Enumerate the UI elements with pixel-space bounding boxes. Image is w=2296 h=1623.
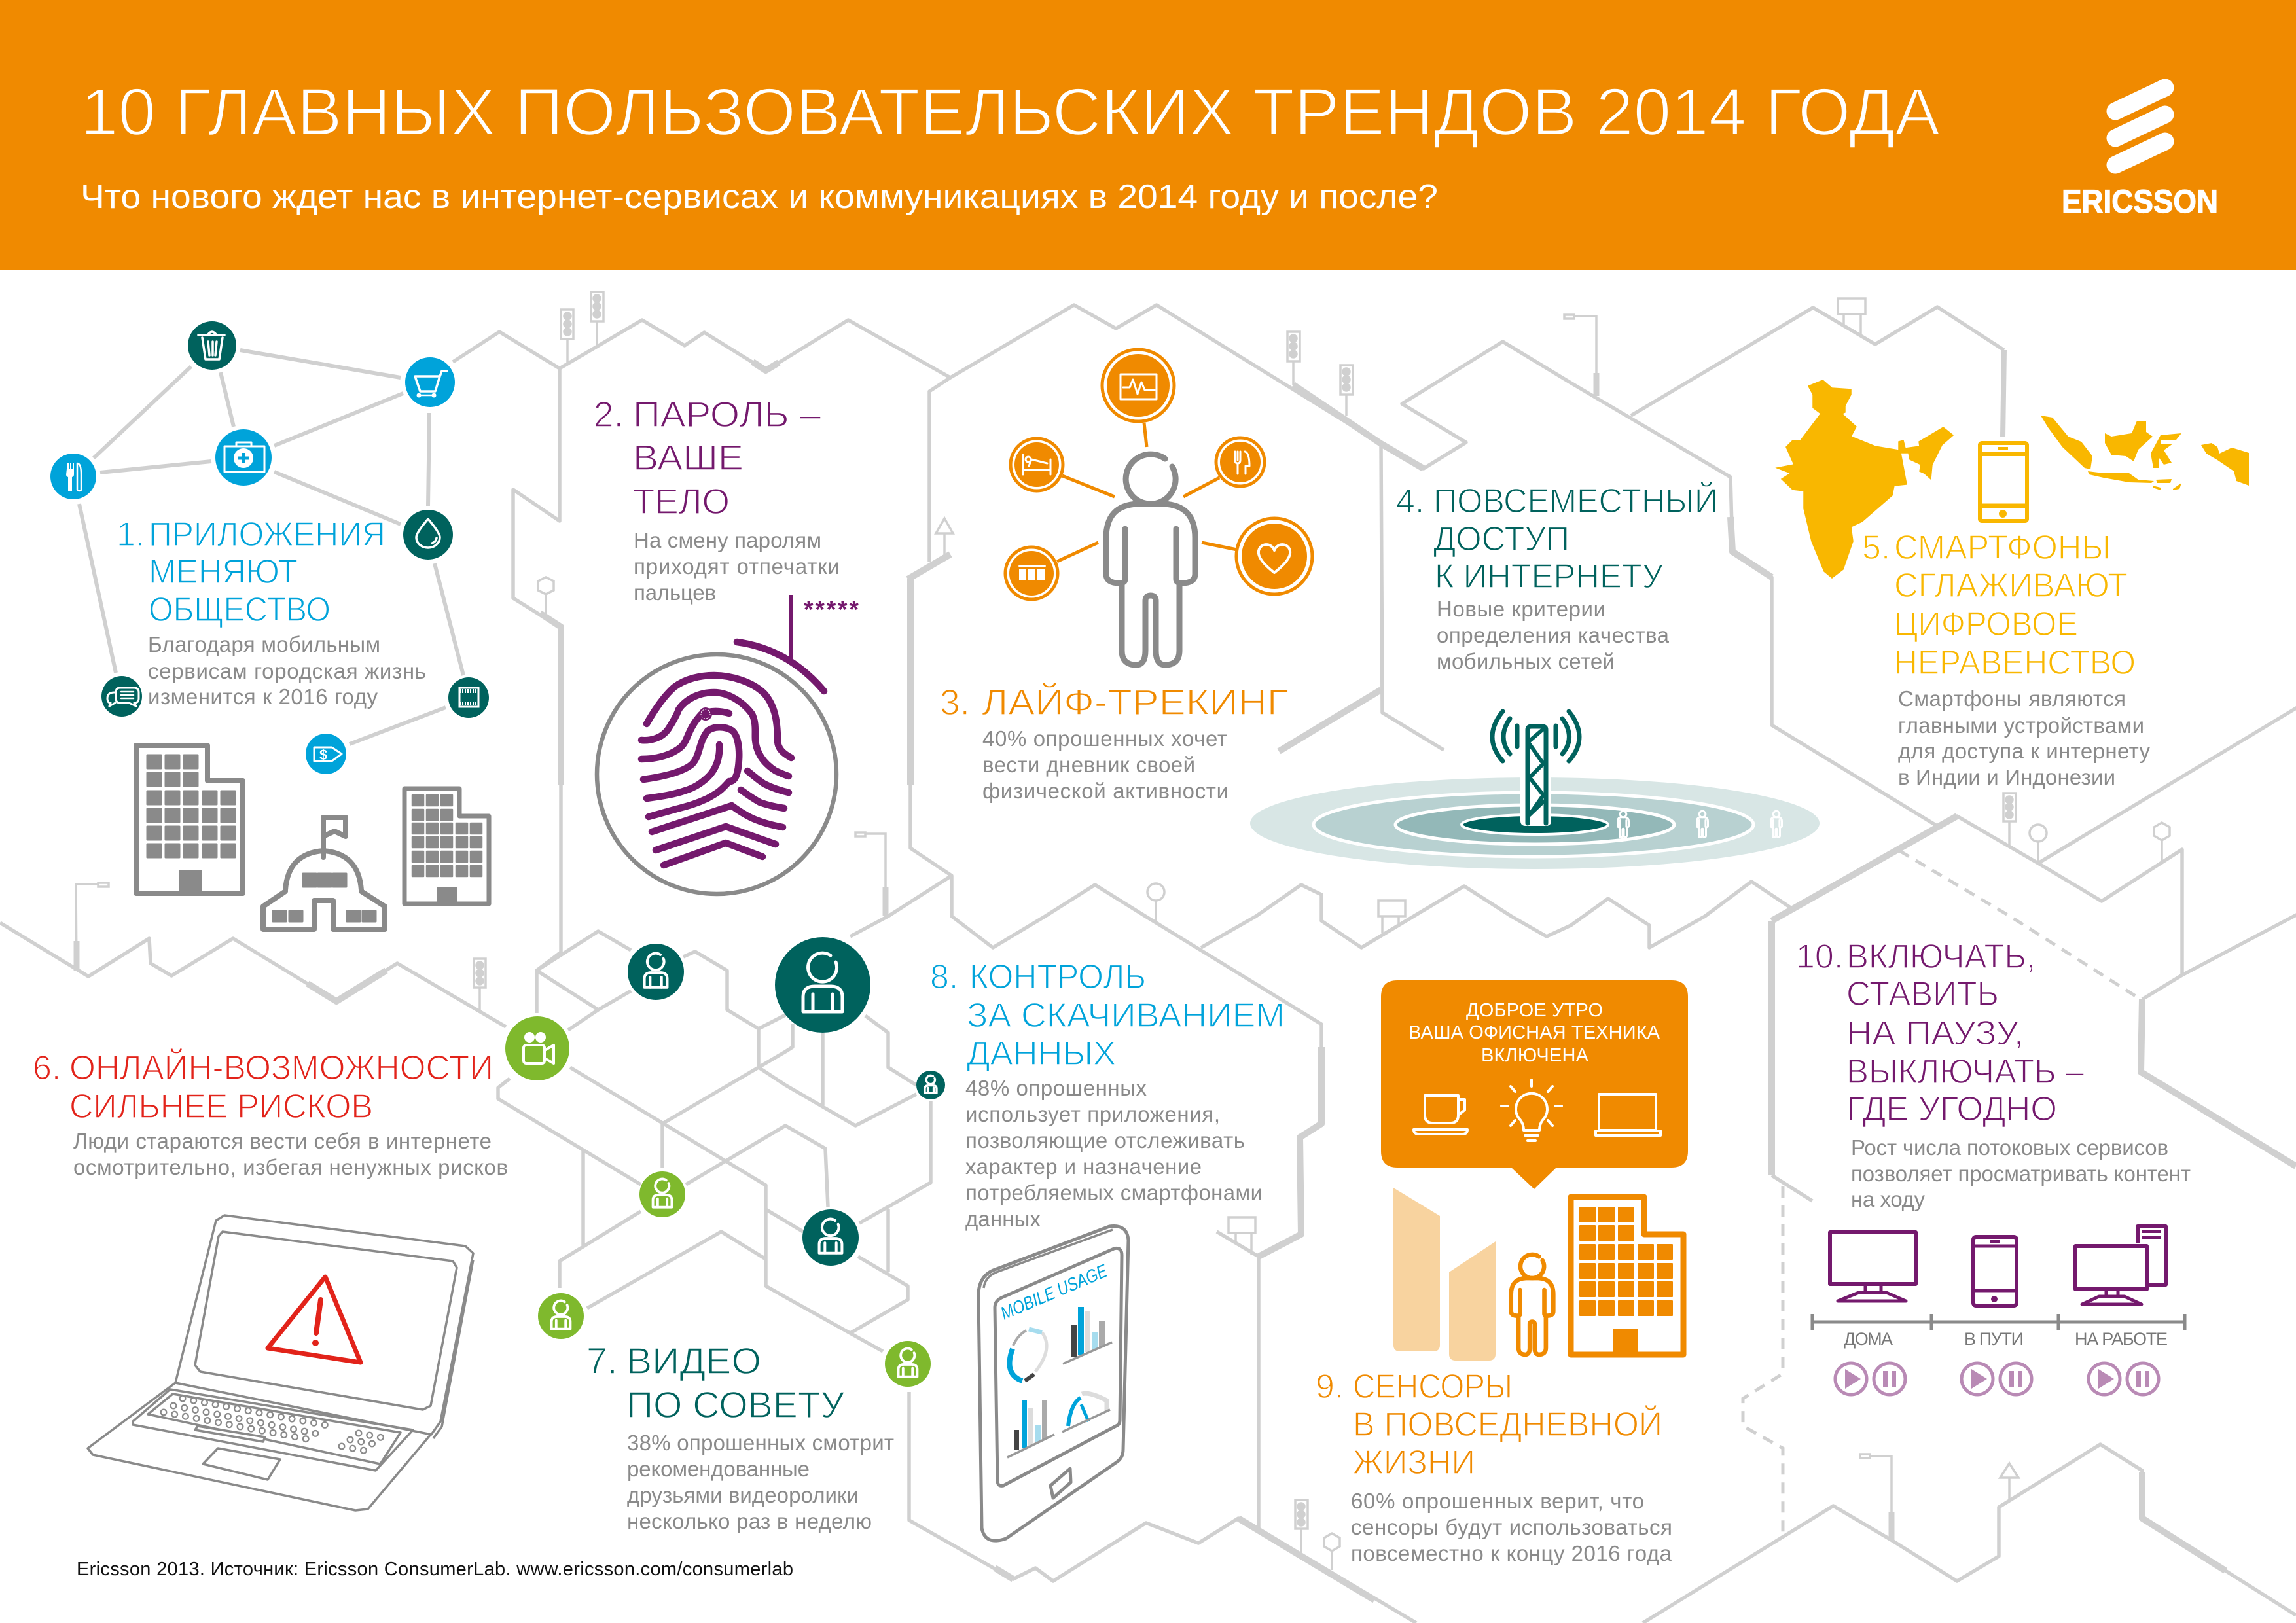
panel 9: sensors in everyday life: [1316, 980, 1688, 1565]
body text: главными устройствами: [1898, 713, 2144, 738]
body text: позволяющие отслеживать: [965, 1128, 1245, 1152]
node: teal person: [802, 1209, 859, 1266]
timeline labels: [1844, 1329, 2168, 1349]
heading: ВИДЕО: [626, 1340, 761, 1382]
node connection lines: [79, 350, 463, 744]
heading: 5.: [1862, 529, 1890, 567]
heading: 9.: [1316, 1368, 1344, 1406]
heading: [594, 394, 821, 522]
heading: [1862, 529, 2136, 682]
subtitle: Что нового ждет нас в интернет-сервисах и коммуникациях в 2014 году и после?: [81, 178, 1438, 216]
body text: 60% опрошенных верит, что: [1351, 1489, 1644, 1513]
body text: осмотрительно, избегая ненужных рисков: [73, 1155, 508, 1179]
body text: [1898, 687, 2151, 789]
Ericsson logo: ERICSSON: [2062, 183, 2218, 220]
icon: small office building: [404, 789, 489, 904]
body text: приходят отпечатки: [634, 554, 840, 579]
body text: На смену паролям: [634, 528, 821, 552]
heading: ТЕЛО: [633, 481, 730, 522]
chart: gauge: [1062, 1393, 1110, 1432]
icon: light bulb: [1501, 1080, 1562, 1141]
speech bubble: ВКЛЮЧЕНА: [1481, 1045, 1589, 1066]
icon: bed: [1011, 438, 1063, 491]
heading: ОНЛАЙН-ВОЗМОЖНОСТИ: [69, 1048, 493, 1087]
title: 10 ГЛАВНЫХ ПОЛЬЗОВАТЕЛЬСКИХ ТРЕНДОВ 2014 ГОДА: [81, 75, 1940, 149]
heading: НА ПАУЗУ,: [1846, 1014, 2024, 1052]
body text: использует приложения,: [965, 1102, 1220, 1126]
panel 1: apps change society: [50, 321, 489, 929]
icon: water drop: [403, 510, 453, 560]
node: small teal person: [916, 1071, 945, 1099]
icon: film strip: [448, 677, 489, 718]
body text: [1851, 1135, 2191, 1211]
timeline labels: В ПУТИ: [1964, 1329, 2024, 1349]
timeline labels: НА РАБОТЕ: [2075, 1329, 2168, 1349]
heading: 7.: [586, 1340, 618, 1382]
icon: school: [263, 817, 385, 929]
heading: ПОВСЕМЕСТНЫЙ: [1433, 482, 1718, 520]
node: video camera: [505, 1016, 569, 1080]
icon: phone: [1973, 1237, 2017, 1306]
icon: laptop with warning: [88, 1215, 473, 1510]
heading: КОНТРОЛЬ: [969, 958, 1146, 996]
heading: ВАШЕ: [633, 437, 744, 478]
figure: orange person: [1511, 1255, 1553, 1355]
heading: [117, 516, 386, 629]
Ericsson logo: [2062, 88, 2218, 220]
body text: Новые критерии: [1437, 597, 1605, 621]
body text: рекомендованные: [627, 1457, 810, 1481]
body text: изменится к 2016 году: [148, 685, 378, 709]
peach tower: [1449, 1241, 1496, 1361]
signal ripple rings: [1250, 777, 1820, 869]
heading: [1396, 482, 1718, 596]
body text: друзьями видеоролики: [627, 1483, 859, 1507]
panel 4: ubiquitous internet: [1250, 482, 1820, 869]
map: Indonesia: [2041, 416, 2249, 490]
body text: Люди стараются вести себя в интернете: [73, 1129, 492, 1153]
node: green person: [538, 1293, 584, 1339]
heading: 8.: [930, 958, 958, 996]
body text: сервисам городская жизнь: [148, 659, 426, 683]
icon: laptop: [1596, 1094, 1660, 1135]
heading: ДОСТУП: [1433, 520, 1570, 558]
heading: ПРИЛОЖЕНИЯ: [149, 516, 386, 554]
icon: trash bin: [188, 321, 236, 370]
body text: [634, 528, 840, 605]
body text: 48% опрошенных: [965, 1076, 1147, 1100]
icon: chat bubbles: [101, 676, 142, 717]
panel 10: play pause stop anywhere: [1796, 938, 2191, 1395]
icon: price tag: $: [319, 747, 327, 763]
heading: ВКЛЮЧАТЬ,: [1846, 938, 2036, 976]
panel 6: online possibilities outweigh risks: [33, 1048, 508, 1510]
speech bubble: ДОБРОЕ УТРО: [1466, 1000, 1603, 1021]
panel 8: data download control: [930, 958, 1285, 1541]
password asterisks: *****: [804, 596, 859, 624]
icon: fingerprint: [597, 595, 836, 894]
peach tower: [1393, 1188, 1440, 1351]
body text: [73, 1129, 508, 1179]
icon: coffee cup: [1414, 1096, 1467, 1134]
body text: мобильных сетей: [1437, 649, 1615, 673]
body text: характер и назначение: [965, 1154, 1202, 1179]
heading: ПАРОЛЬ –: [633, 394, 821, 435]
icon: office building: [136, 745, 243, 893]
body text: физической активности: [982, 779, 1229, 803]
heading: СЕНСОРЫ: [1353, 1368, 1513, 1406]
header band: [0, 0, 2296, 270]
body text: определения качества: [1437, 623, 1670, 647]
label: mobile usage: MOBILE USAGE: [997, 1260, 1111, 1324]
map: India: [1777, 380, 1953, 578]
panel 2: password is your body: [594, 394, 859, 894]
street furniture: traffic lights, lamps, signs: [76, 292, 2170, 1570]
heading: СМАРТФОНЫ: [1894, 529, 2111, 567]
heading: СГЛАЖИВАЮТ: [1894, 567, 2128, 605]
heading: ЛАЙФ-ТРЕКИНГ: [982, 681, 1289, 722]
body text: 40% опрошенных хочет: [982, 726, 1227, 751]
heading: ЖИЗНИ: [1353, 1444, 1475, 1482]
body text: Рост числа потоковых сервисов: [1851, 1135, 2168, 1160]
panel 3: life tracking: [940, 349, 1312, 803]
body text: повсеместно к концу 2016 года: [1351, 1541, 1672, 1565]
heading: 10.: [1796, 938, 1843, 976]
heading: НЕРАВЕНСТВО: [1894, 644, 2136, 682]
heading: [33, 1048, 493, 1126]
icon: television: [1830, 1232, 1916, 1301]
play and pause buttons: [1835, 1363, 2159, 1395]
heading: 3.: [940, 682, 970, 722]
icon: calendar boxes: [1005, 547, 1058, 599]
source footer: Ericsson 2013. Источник: Ericsson ConsumerLab. www.ericsson.com/consumerlab: [77, 1559, 793, 1580]
body text: для доступа к интернету: [1898, 739, 2151, 763]
body text: [982, 726, 1229, 803]
heading: К ИНТЕРНЕТУ: [1435, 558, 1664, 596]
chart: donut: [1009, 1329, 1047, 1381]
speech bubble: [1381, 980, 1688, 1189]
heading: СТАВИТЬ: [1846, 975, 1999, 1013]
icon: health monitor: [1102, 349, 1174, 421]
heading: ВЫКЛЮЧАТЬ –: [1846, 1053, 2084, 1091]
icon: smartphone with usage charts: [978, 1226, 1128, 1541]
node: large teal person: [775, 937, 870, 1033]
node: green person: [639, 1171, 685, 1217]
body text: 38% опрошенных смотрит: [627, 1431, 894, 1455]
heading: ЗА СКАЧИВАНИЕМ: [967, 997, 1285, 1035]
node: green person: [885, 1341, 931, 1387]
body text: в Индии и Индонезии: [1898, 765, 2115, 789]
body text: несколько раз в неделю: [627, 1509, 872, 1533]
chart: bars upper: [1063, 1307, 1112, 1364]
heading: ДАННЫХ: [967, 1035, 1116, 1073]
heading: 2.: [594, 394, 624, 435]
panel 7: recommended video: [505, 937, 945, 1533]
icon: orange office building: [1571, 1197, 1683, 1355]
heading: ОБЩЕСТВО: [149, 591, 331, 629]
heading: СИЛЬНЕЕ РИСКОВ: [69, 1088, 373, 1126]
heading: [586, 1340, 845, 1426]
body text: на ходу: [1851, 1187, 1926, 1211]
connector lines: [1057, 423, 1237, 562]
timeline labels: ДОМА: [1844, 1329, 1893, 1349]
node: teal person: [628, 944, 684, 1000]
body text: [627, 1431, 894, 1533]
timeline: [1812, 1314, 2185, 1330]
heading: [930, 958, 1285, 1073]
heading: 4.: [1396, 482, 1424, 520]
figures on rings: [1618, 811, 1782, 838]
body text: [965, 1076, 1263, 1231]
icon: heart: [1236, 518, 1312, 594]
icon: first aid kit: [215, 429, 272, 486]
body text: Смартфоны являются: [1898, 687, 2126, 711]
body text: вести дневник своей: [982, 753, 1195, 777]
heading: [1796, 938, 2084, 1128]
heading: ЦИФРОВОЕ: [1894, 605, 2078, 643]
heading: 6.: [33, 1049, 61, 1087]
body text: Благодаря мобильным: [148, 632, 380, 656]
icon: smartphone: [1979, 443, 2028, 521]
heading: МЕНЯЮТ: [149, 553, 298, 591]
speech bubble: ВАША ОФИСНАЯ ТЕХНИКА: [1408, 1022, 1660, 1043]
figure: person: [1106, 454, 1195, 665]
panel 5: smartphones: [1777, 380, 2249, 789]
icon: antenna tower: [1492, 711, 1579, 826]
icon: desktop computer: [2075, 1226, 2166, 1304]
body text: [148, 632, 426, 709]
heading: ГДЕ УГОДНО: [1846, 1090, 2057, 1128]
body text: пальцев: [634, 580, 716, 605]
body text: потребляемых смартфонами: [965, 1181, 1263, 1205]
heading: [1316, 1368, 1662, 1482]
icon: shopping cart: [405, 357, 455, 407]
heading: ПО СОВЕТУ: [626, 1384, 845, 1426]
icon: price tag: [306, 734, 346, 774]
icon: fork and knife orange: [1216, 438, 1265, 486]
body text: [1437, 597, 1670, 673]
icon: fork and knife: [50, 454, 96, 499]
heading: В ПОВСЕДНЕВНОЙ: [1353, 1405, 1662, 1444]
body text: сенсоры будут использоваться: [1351, 1515, 1672, 1539]
heading: 1.: [117, 516, 145, 554]
body text: позволяет просматривать контент: [1851, 1162, 2191, 1186]
body text: данных: [965, 1207, 1041, 1231]
chart: bars lower: [1007, 1400, 1054, 1457]
body text: [1351, 1489, 1672, 1565]
